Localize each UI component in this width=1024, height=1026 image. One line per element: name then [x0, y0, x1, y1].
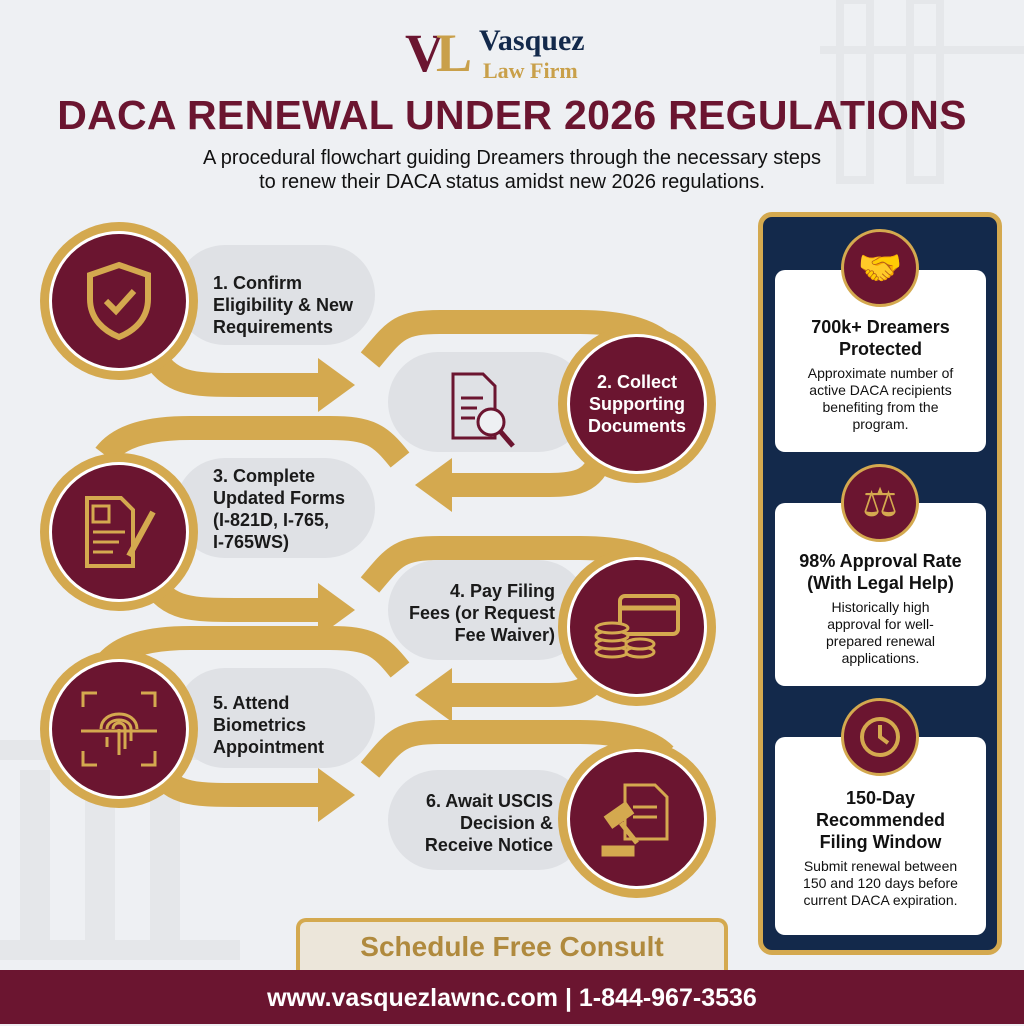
step 1: 1. Confirm: [213, 273, 302, 293]
step 4: Fee Waiver): [455, 625, 555, 645]
stat card 1: [775, 270, 986, 452]
step 6: Receive Notice: [425, 835, 553, 855]
icon: handshake: [841, 229, 919, 307]
button: schedule consult: Schedule Free Consult: [360, 931, 664, 962]
step 1: Requirements: [213, 317, 333, 337]
footer: www.vasquezlawnc.com | 1-844-967-3536: [267, 984, 757, 1012]
step 3: (I-821D, I-765,: [213, 510, 329, 530]
button: schedule consult: [296, 918, 728, 974]
stat card 2: [775, 503, 986, 686]
step 4: [388, 551, 716, 706]
stat card 2: applications.: [842, 650, 919, 666]
step 3: Updated Forms: [213, 488, 345, 508]
step 6: [388, 746, 716, 898]
icon: handshake: 🤝: [858, 247, 902, 288]
step 3: 3. Complete: [213, 466, 315, 486]
step 4: 4. Pay Filing: [450, 581, 555, 601]
stat card 1: benefiting from the: [823, 399, 938, 415]
step 1: Eligibility & New: [213, 295, 353, 315]
footer: [0, 970, 1024, 1024]
step 3: [40, 453, 375, 611]
stat card 3: Filing Window: [820, 832, 941, 852]
stat card 3: current DACA expiration.: [803, 892, 958, 908]
subtitle: A procedural flowchart guiding Dreamers through the necessary steps: [203, 147, 821, 169]
step 5: 5. Attend: [213, 693, 289, 713]
logo: Vasquez: [479, 24, 585, 57]
stat card 2: (With Legal Help): [807, 573, 954, 593]
stat card 1: Approximate number of: [808, 365, 953, 381]
step 5: [40, 652, 375, 808]
icon: scales: [841, 464, 919, 542]
step 6: 6. Await USCIS: [426, 791, 553, 811]
stat card 1: 700k+ Dreamers: [811, 317, 950, 337]
flowchart: [40, 222, 716, 898]
logo: [405, 23, 585, 83]
step 2: [388, 330, 716, 483]
subtitle: [203, 147, 821, 193]
logo: VL: [405, 23, 464, 83]
stat card 2: approval for well-: [827, 616, 934, 632]
stat card 3: [775, 737, 986, 935]
logo: Law Firm: [483, 58, 578, 83]
stat card 1: Protected: [839, 339, 922, 359]
stat card 3: Recommended: [816, 810, 945, 830]
stat card 2: Historically high: [831, 599, 930, 615]
stat card 3: Submit renewal between: [804, 858, 957, 874]
stat card 2: prepared renewal: [826, 633, 935, 649]
step 4: Fees (or Request: [409, 603, 555, 623]
stat card 1: program.: [852, 416, 909, 432]
icon: clock: [841, 698, 919, 776]
icon: scales: ⚖: [862, 481, 898, 525]
stat card 3: 150 and 120 days before: [803, 875, 958, 891]
step 2: Documents: [588, 416, 686, 436]
step 5: Biometrics: [213, 715, 306, 735]
title: DACA RENEWAL UNDER 2026 REGULATIONS: [57, 92, 967, 138]
stat card 2: 98% Approval Rate: [799, 551, 962, 571]
step 2: 2. Collect: [597, 372, 677, 392]
step 5: Appointment: [213, 737, 324, 757]
step 3: I-765WS): [213, 532, 289, 552]
step 2: Supporting: [589, 394, 685, 414]
stat card 3: 150-Day: [846, 788, 915, 808]
panel: stats: [758, 212, 1002, 955]
subtitle: to renew their DACA status amidst new 2026 regulations.: [259, 171, 765, 193]
step 6: Decision &: [460, 813, 553, 833]
step 1: [40, 222, 375, 380]
stat card 1: active DACA recipients: [809, 382, 952, 398]
